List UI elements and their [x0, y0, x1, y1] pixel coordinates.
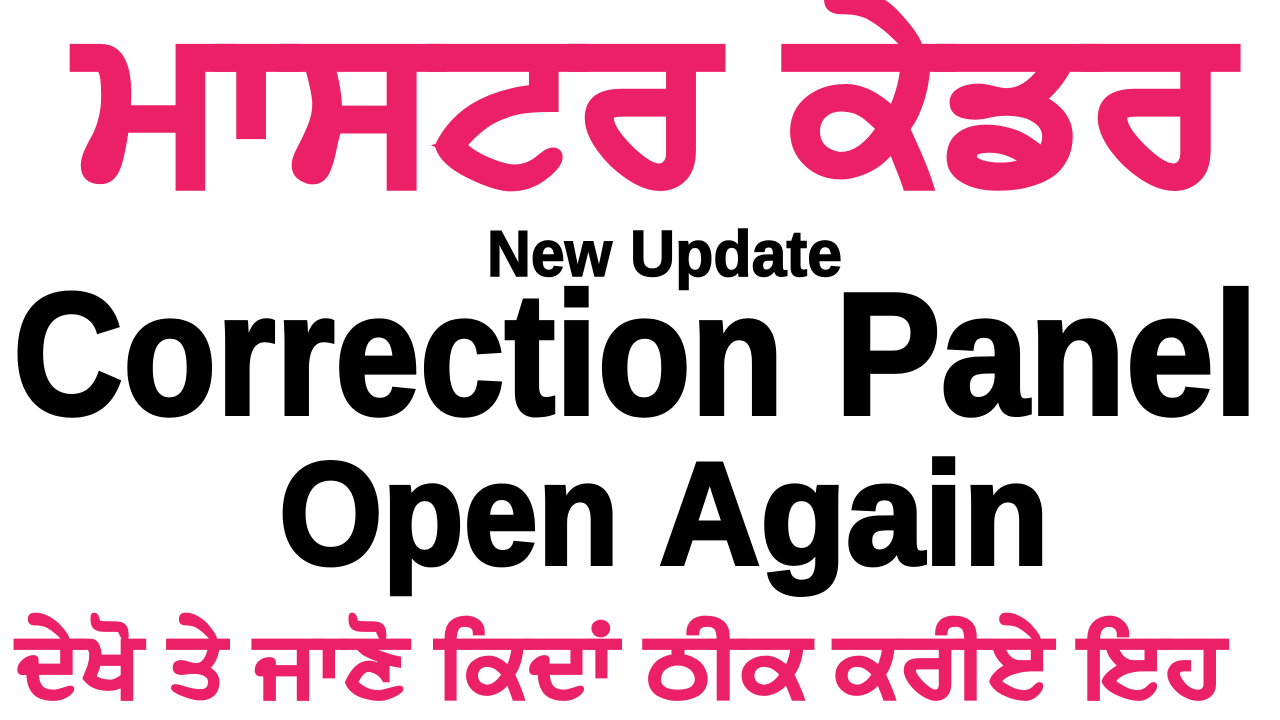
title: Punjabi heading [73, 0, 1238, 218]
subtitle: New Update: Update [630, 217, 842, 290]
footer: Punjabi call to action: ਦੇਖੋ [14, 614, 145, 713]
footer: Punjabi call to action: ਕਰੀਏ [832, 614, 1055, 713]
footer: Punjabi call to action: ਤੇ [167, 614, 229, 713]
footer: Punjabi call to action [14, 614, 1228, 713]
footer: Punjabi call to action: ਠੀਕ [643, 615, 813, 713]
footer: Punjabi call to action: ਇਹ [1076, 615, 1228, 713]
heading: Open Again [279, 432, 1049, 595]
heading: Open Again: Again [659, 432, 1049, 595]
heading: Open Again: Open [279, 432, 619, 595]
subtitle: New Update: New [487, 217, 612, 290]
heading: Correction Panel: Correction [13, 256, 784, 451]
footer: Punjabi call to action: ਕਿਦਾਂ [434, 615, 620, 713]
subtitle: New Update [487, 217, 842, 290]
footer: Punjabi call to action: ਜਾਣੋ [252, 614, 410, 713]
